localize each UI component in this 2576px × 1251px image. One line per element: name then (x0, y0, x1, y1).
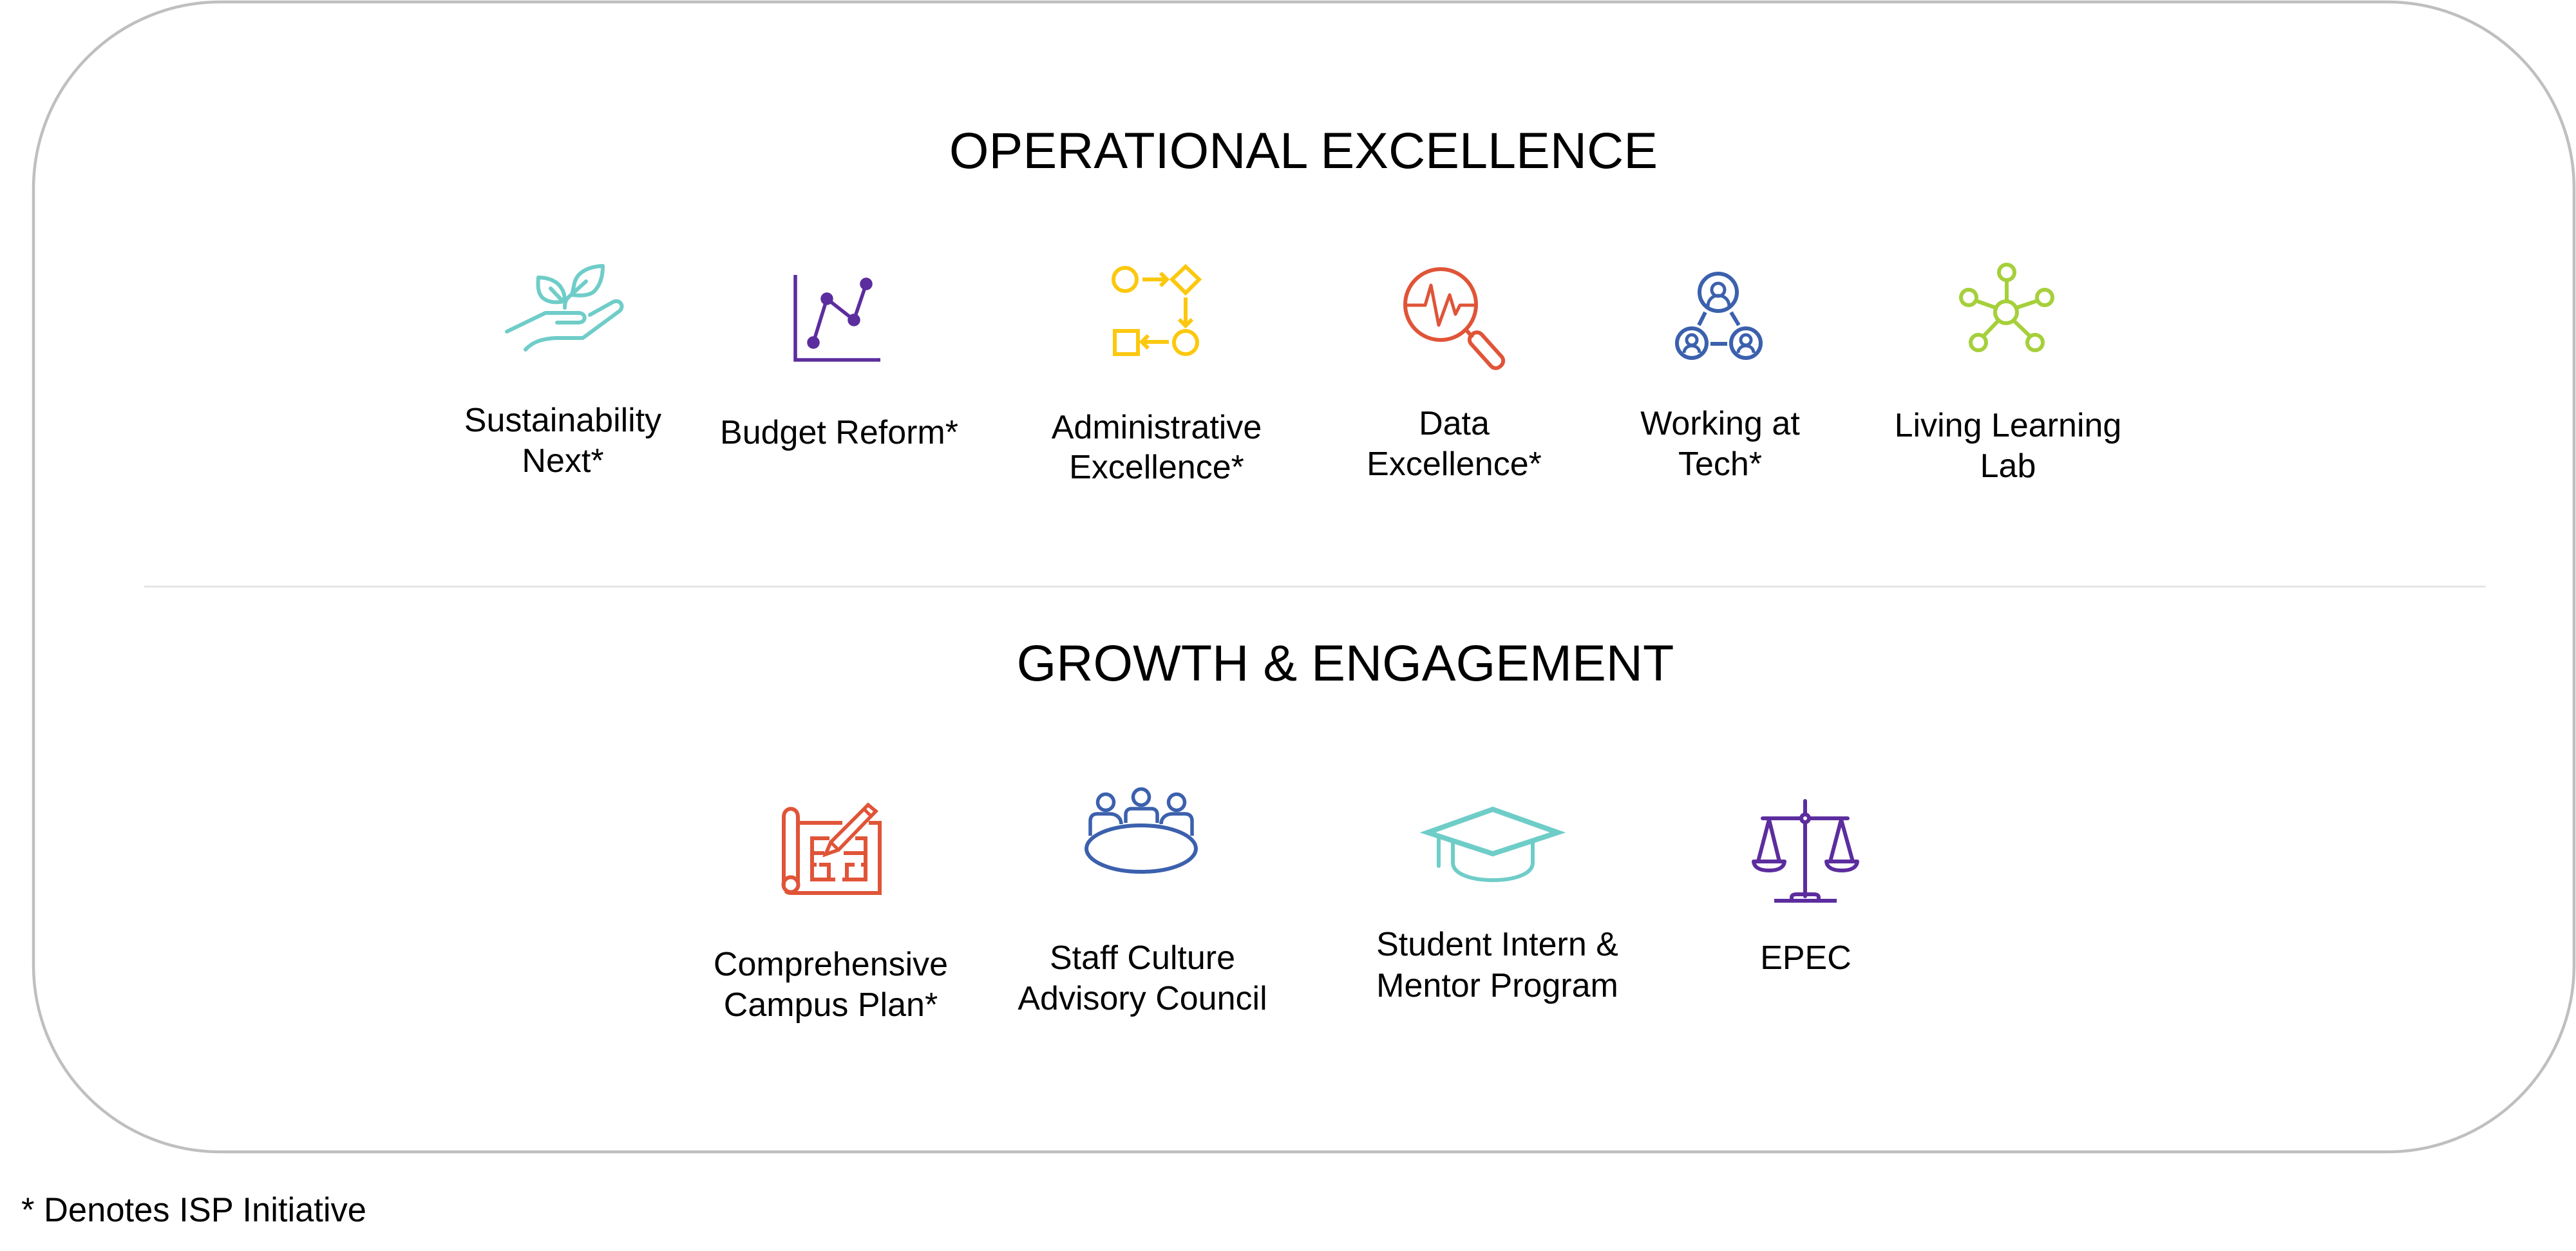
item: Working at Tech (1640, 274, 1800, 483)
icon: magnifier with pulse (1405, 269, 1506, 371)
icon: process flow (1113, 267, 1199, 354)
item: Sustainability Next (464, 266, 661, 480)
label: Administrative (1052, 409, 1262, 446)
item: Budget Reform (720, 275, 958, 451)
item: Student Intern and Mentor Program (1376, 809, 1618, 1004)
heading: operational excellence: OPERATIONAL EXCELLENCE (949, 122, 1658, 179)
label: Living Learning (1895, 407, 2121, 444)
label: Working at (1640, 405, 1800, 442)
label: Tech* (1678, 446, 1762, 483)
heading: growth and engagement: GROWTH & ENGAGEMENT (1017, 634, 1674, 691)
icon: graduation cap (1428, 809, 1558, 880)
label: Mentor Program (1376, 967, 1618, 1004)
icon: people around a table (1086, 789, 1196, 872)
label: Staff Culture (1050, 939, 1235, 977)
icon: connected people (1677, 274, 1761, 358)
label: Next* (522, 442, 604, 480)
item: Living Learning Lab (1895, 265, 2121, 485)
icon: network nodes (1961, 265, 2052, 350)
label: Student Intern & (1376, 926, 1618, 963)
label: Sustainability (464, 402, 661, 439)
label: Excellence* (1367, 446, 1542, 483)
icon: blueprint and pencil (783, 805, 880, 893)
item: Comprehensive Campus Plan (714, 805, 948, 1024)
label: Lab (1980, 447, 2036, 485)
label: Comprehensive (714, 946, 948, 983)
item: Administrative Excellence (1052, 267, 1262, 486)
label: Budget Reform* (720, 414, 958, 451)
label: Data (1419, 405, 1490, 442)
item: Staff Culture Advisory Council (1018, 789, 1267, 1017)
item: EPEC (1754, 801, 1857, 977)
footnote: * Denotes ISP Initiative (21, 1191, 366, 1229)
label: EPEC (1760, 939, 1852, 977)
label: Advisory Council (1018, 980, 1267, 1017)
label: Excellence* (1069, 449, 1244, 486)
label: Campus Plan* (724, 986, 938, 1024)
icon: hand holding plant (507, 266, 621, 350)
icon: line chart (795, 275, 880, 360)
item: Data Excellence (1367, 269, 1542, 483)
icon: balance scale (1754, 801, 1857, 901)
